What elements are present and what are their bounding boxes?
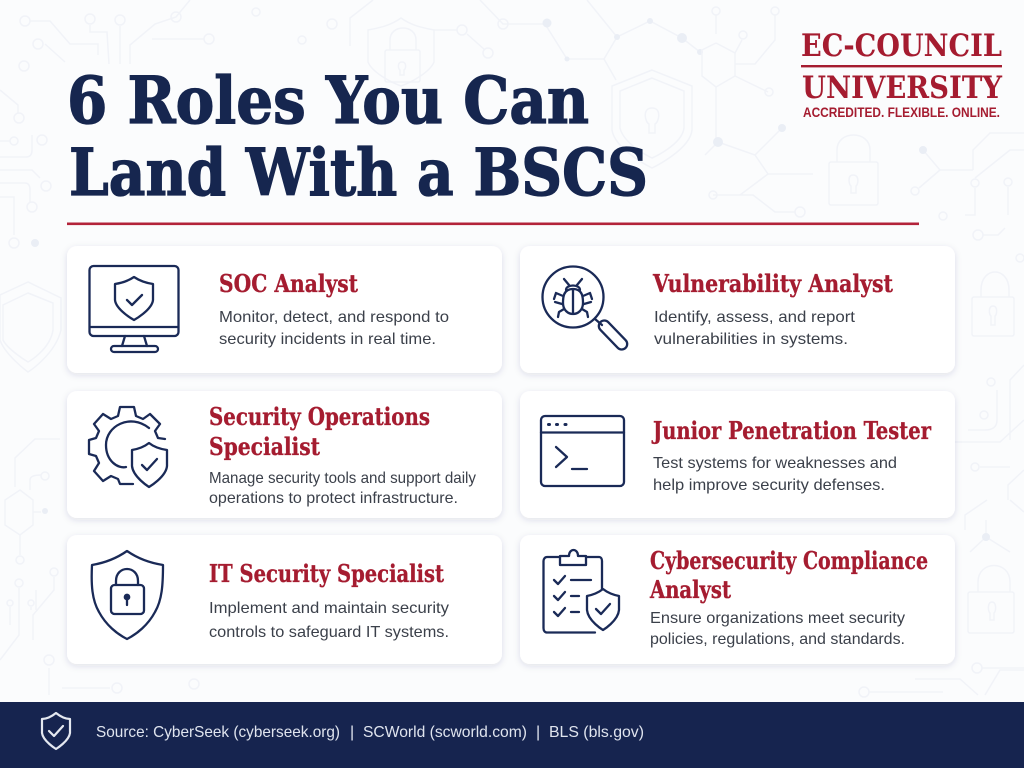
icon: clipboard checklist with shield: [544, 550, 619, 632]
source line: [96, 724, 644, 741]
panel: IT Security Specialist: [67, 535, 502, 664]
heading: [209, 402, 430, 461]
description: policies, regulations, and standards.: [650, 631, 905, 648]
source line: Source: CyberSeek (cyberseek.org): [96, 724, 340, 741]
panel: SOC Analyst: [67, 246, 502, 373]
description: Identify, assess, and report: [654, 309, 856, 326]
source line: BLS (bls.gov): [549, 724, 644, 741]
description: Test systems for weaknesses and: [653, 455, 897, 472]
source line: SCWorld (scworld.com): [363, 724, 527, 741]
icon: monitor with shield: [90, 266, 178, 352]
title: Land With a BSCS: [69, 135, 648, 211]
source line: |: [536, 724, 540, 741]
panel: Cybersecurity Compliance Analyst: [520, 535, 955, 664]
logo: EC-Council University: EC-COUNCIL: [801, 28, 1002, 64]
heading: Cybersecurity Compliance: [650, 546, 928, 575]
description: vulnerabilities in systems.: [654, 331, 848, 348]
description: help improve security defenses.: [653, 477, 885, 494]
heading: [649, 546, 928, 604]
heading: Specialist: [209, 432, 320, 461]
icon: footer shield: [42, 713, 70, 749]
description: Ensure organizations meet security: [650, 610, 905, 627]
description: operations to protect infrastructure.: [209, 490, 458, 507]
icon: gear with shield: [89, 407, 167, 487]
source line: |: [350, 724, 354, 741]
heading: Junior Penetration Tester: [651, 416, 931, 445]
icon: bug under magnifier: [542, 266, 629, 352]
heading: Vulnerability Analyst: [652, 269, 893, 298]
description: Monitor, detect, and respond to: [219, 309, 449, 326]
heading: Security Operations: [209, 402, 430, 431]
panel: Security Operations Specialist: [67, 391, 502, 518]
icon: shield with padlock: [92, 551, 163, 639]
description: [653, 455, 897, 494]
description: Manage security tools and support daily: [209, 470, 476, 487]
footer bar: [0, 702, 1024, 768]
title: [67, 63, 648, 211]
heading: IT Security Specialist: [209, 559, 444, 588]
description: [219, 309, 449, 348]
description: [650, 610, 905, 648]
description: controls to safeguard IT systems.: [209, 624, 449, 641]
heading: SOC Analyst: [219, 269, 358, 298]
panel: Junior Penetration Tester: [520, 391, 955, 518]
heading: Analyst: [649, 575, 731, 604]
logo: EC-Council University: [801, 28, 1003, 120]
description: Implement and maintain security: [209, 600, 449, 617]
title: 6 Roles You Can: [67, 63, 589, 139]
logo: EC-Council University: UNIVERSITY: [802, 70, 1003, 106]
description: security incidents in real time.: [219, 331, 436, 348]
description: [654, 309, 856, 348]
panel: Vulnerability Analyst: [520, 246, 955, 373]
icon: terminal window: [541, 416, 624, 486]
description: [209, 470, 476, 507]
description: [209, 600, 449, 641]
